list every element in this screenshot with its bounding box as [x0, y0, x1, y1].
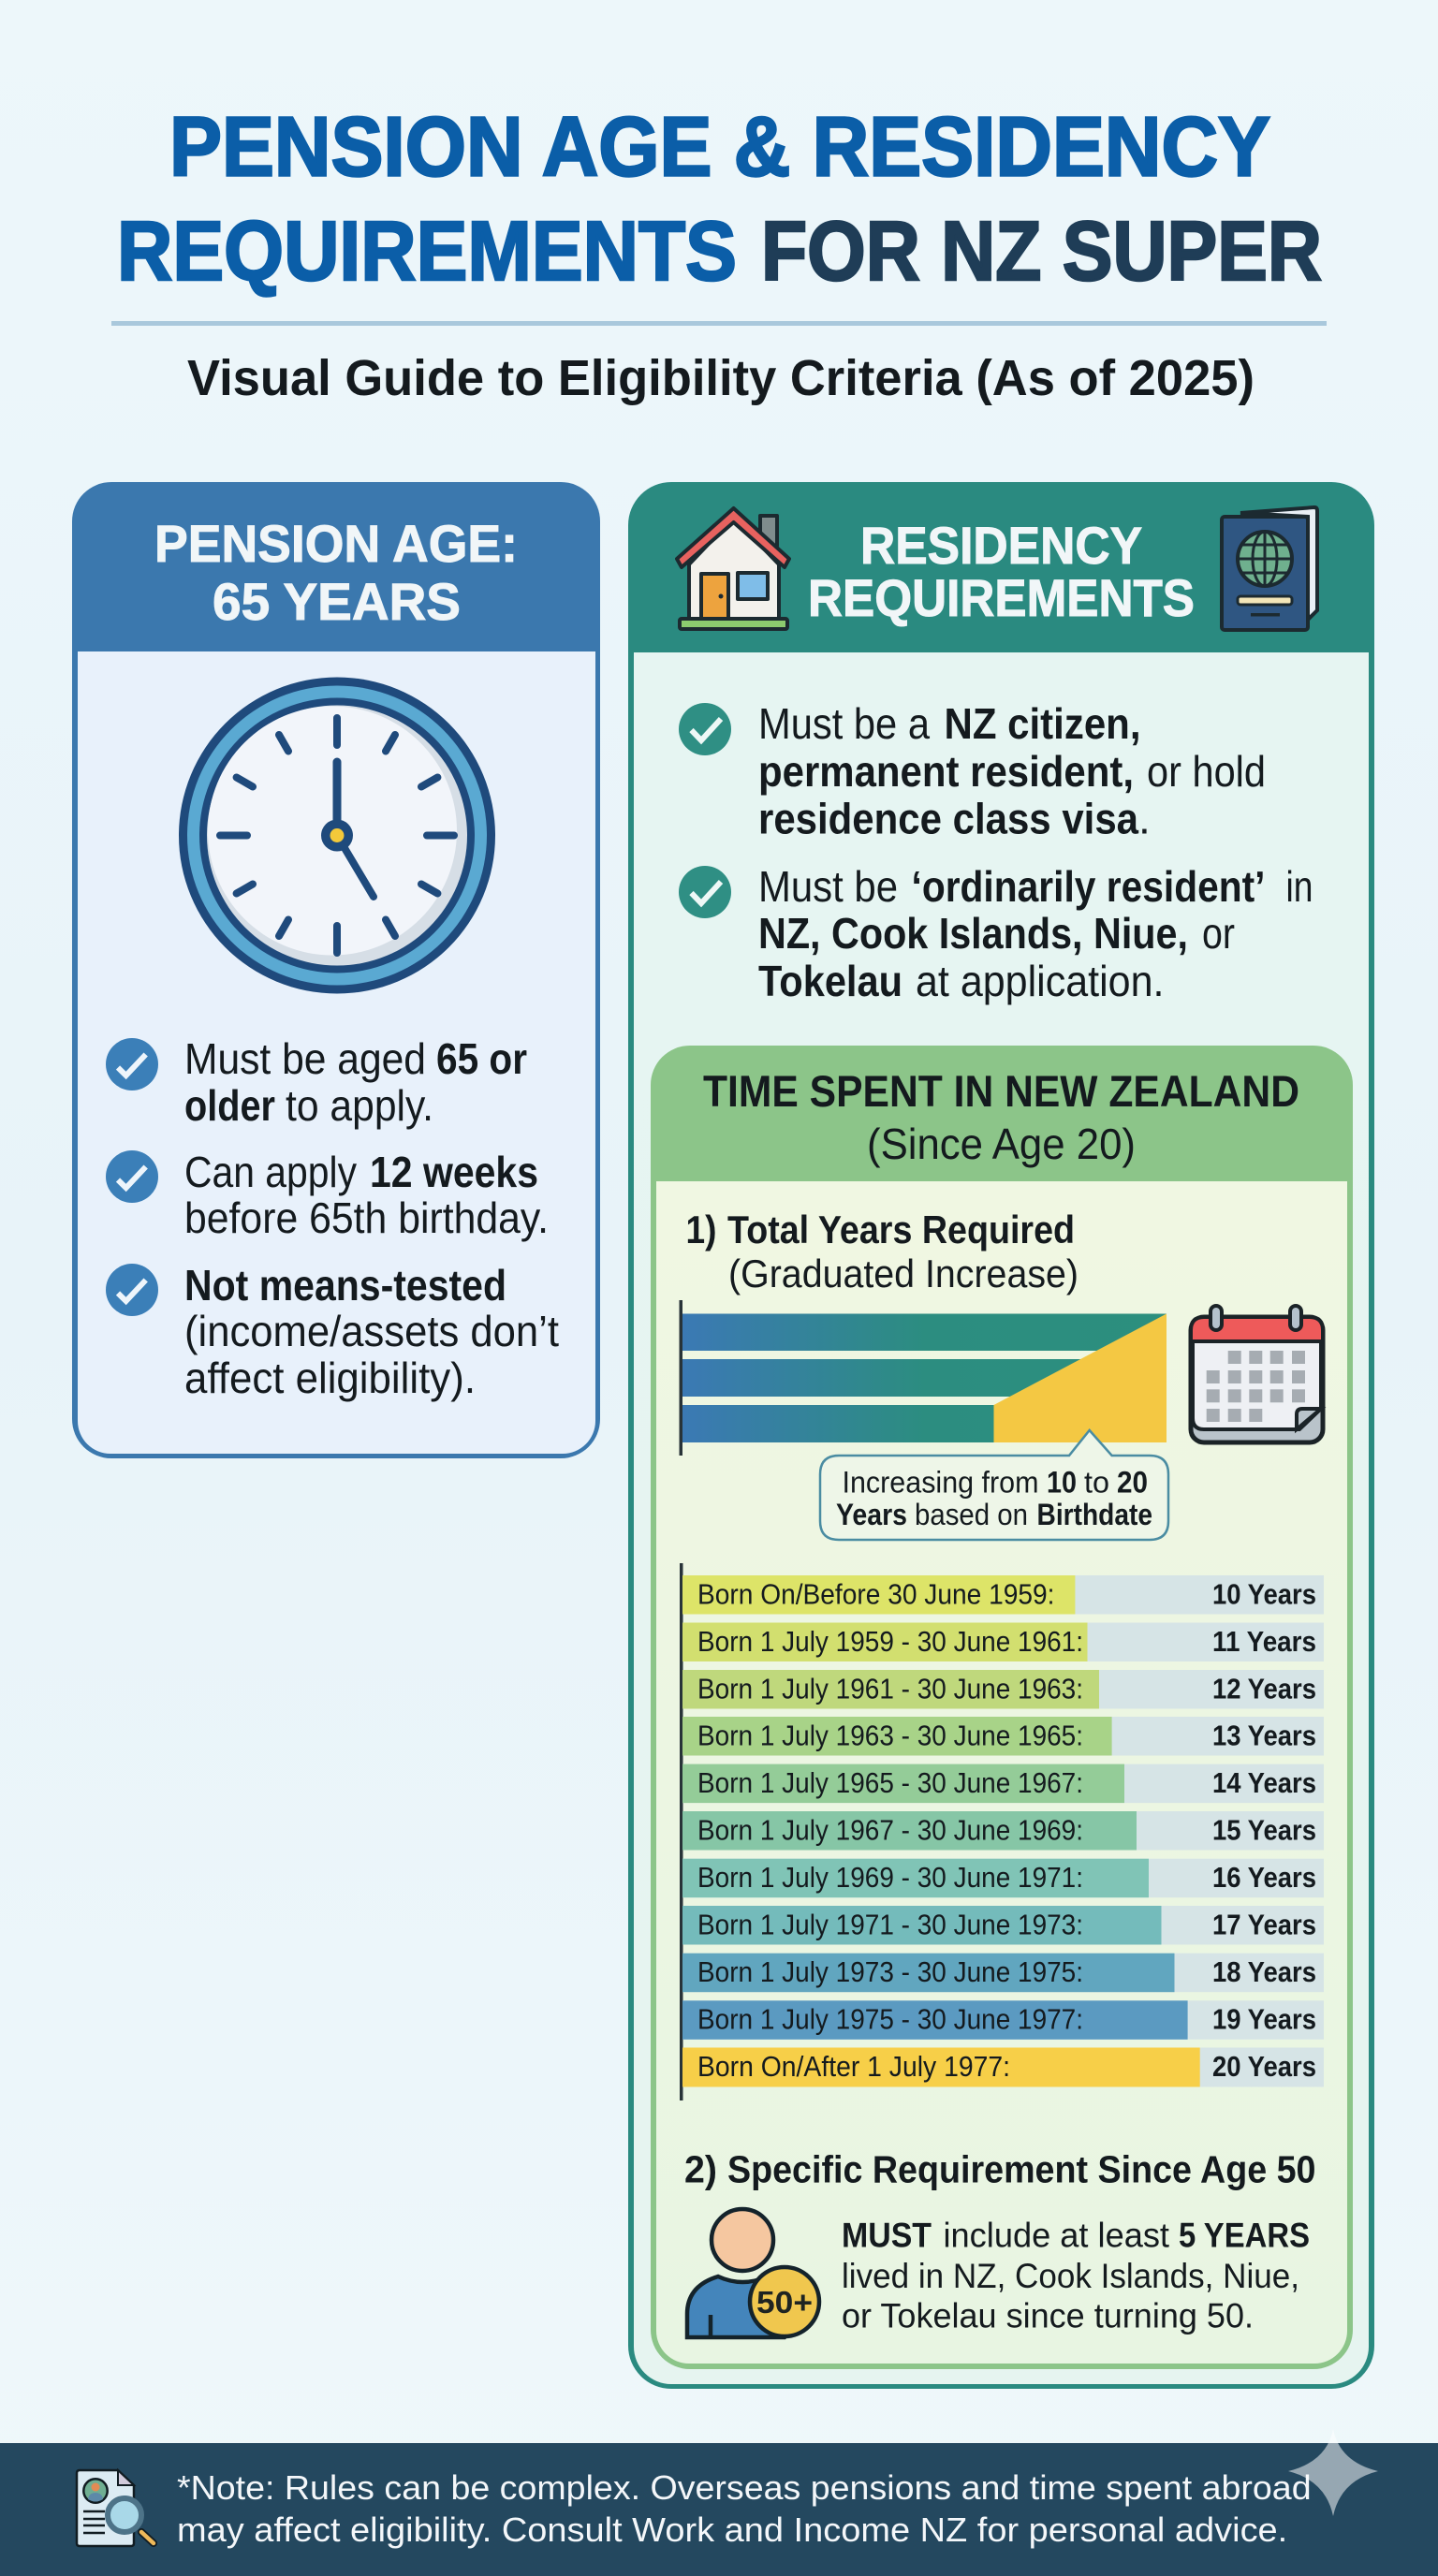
bullet: ordinarily resident: or	[1202, 909, 1235, 958]
heading: time spent: TIME SPENT IN NEW ZEALAND	[703, 1066, 1299, 1116]
row: 11 years	[682, 1623, 1324, 1661]
row: 13 years: Born 1 July 1963 - 30 June 1965:	[697, 1720, 1083, 1752]
bullet: not means-tested	[106, 1261, 559, 1402]
subheading: total years required: (Graduated Increase)	[728, 1251, 1078, 1295]
subheading: requirement since age 50: 2)	[684, 2148, 717, 2191]
bullet: ordinarily resident	[679, 862, 1313, 1005]
icon: passport	[1222, 507, 1317, 630]
text: must include 5 years: MUST	[842, 2217, 932, 2255]
row: 10 years	[682, 1575, 1324, 1614]
heading: residency: REQUIREMENTS	[808, 568, 1195, 627]
bullet: citizen: NZ citizen,	[944, 699, 1140, 748]
bullet: ordinarily resident: Tokelau	[758, 957, 902, 1005]
callout: increasing from 10 to 20: Increasing from	[843, 1466, 1039, 1500]
row: 10 years: 10 Years	[1212, 1579, 1316, 1611]
icon: person 50+: 50+	[756, 2285, 813, 2320]
heading: pension age: 65 YEARS	[213, 572, 461, 631]
bullet: not means-tested: Not means-tested	[184, 1261, 506, 1310]
row: 14 years: 14 Years	[1212, 1767, 1316, 1799]
bullet: ordinarily resident: at application.	[916, 957, 1165, 1005]
panel: residency requirements	[628, 482, 1374, 2389]
bullet: aged 65: to apply.	[286, 1081, 433, 1130]
row: 13 years: 13 Years	[1212, 1720, 1316, 1752]
row: 18 years	[682, 1954, 1324, 1992]
title: REQUIREMENTS	[117, 205, 737, 299]
subheading: requirement since age 50: Specific Requirement Since Age 50	[727, 2148, 1316, 2191]
icon: calendar	[1191, 1306, 1323, 1442]
title: FOR NZ SUPER	[761, 205, 1322, 299]
row: 16 years	[682, 1859, 1324, 1897]
callout: increasing from 10 to 20: to	[1084, 1466, 1109, 1500]
bullet: aged 65	[106, 1034, 527, 1130]
bullet: aged 65: older	[184, 1081, 275, 1130]
callout: increasing from 10 to 20	[820, 1430, 1168, 1540]
title	[117, 101, 1322, 299]
table: years required by birthdate	[680, 1563, 1324, 2100]
bullet: citizen	[679, 699, 1266, 842]
bullet: not means-tested: affect eligibility).	[184, 1354, 476, 1402]
bullet: aged 65: Must be aged	[184, 1034, 426, 1083]
heading: residency	[808, 516, 1195, 627]
bullet: citizen: .	[1138, 794, 1151, 842]
footer	[0, 2443, 1438, 2576]
title: PENSION AGE & RESIDENCY	[169, 101, 1270, 195]
row: 15 years: Born 1 July 1967 - 30 June 1969:	[697, 1814, 1083, 1846]
bullet: ordinarily resident: NZ, Cook Islands, Niue,	[758, 909, 1188, 958]
row: 12 years: 12 Years	[1212, 1674, 1316, 1705]
row: 19 years	[682, 2000, 1324, 2040]
row: 18 years: 18 Years	[1212, 1956, 1316, 1988]
row: 17 years	[682, 1906, 1324, 1945]
row: 17 years: Born 1 July 1971 - 30 June 1973:	[697, 1910, 1083, 1941]
row: 12 years: Born 1 July 1961 - 30 June 1963:	[697, 1674, 1083, 1705]
row: 20 years: 20 Years	[1212, 2051, 1316, 2083]
row: 19 years: Born 1 July 1975 - 30 June 1977:	[697, 2003, 1083, 2035]
heading: pension age: PENSION AGE:	[154, 514, 518, 573]
icon: sparkle	[1288, 2429, 1378, 2516]
text: must include 5 years: 5 YEARS	[1179, 2217, 1310, 2255]
row: 19 years: 19 Years	[1212, 2003, 1316, 2035]
subheading: total years required: Total Years Required	[727, 1208, 1075, 1251]
bullet: 12 weeks: 12 weeks	[370, 1148, 538, 1196]
bullet: ordinarily resident: in	[1286, 862, 1313, 911]
heading: time spent: (Since Age 20)	[867, 1120, 1136, 1168]
subtitle: Visual Guide to Eligibility Criteria (As of 2025)	[187, 350, 1255, 406]
bullet: ordinarily resident: Must be	[758, 862, 898, 911]
panel: time spent in New Zealand	[651, 1046, 1353, 2369]
row: 18 years: Born 1 July 1973 - 30 June 1975:	[697, 1956, 1083, 1988]
row: 17 years: 17 Years	[1212, 1910, 1316, 1941]
row: 20 years: Born On/After 1 July 1977:	[697, 2051, 1010, 2083]
icon: clock	[179, 678, 495, 994]
row: 10 years: Born On/Before 30 June 1959:	[697, 1579, 1054, 1611]
subheading: total years required	[685, 1208, 1078, 1295]
icon: person 50+	[687, 2209, 819, 2337]
row: 15 years: 15 Years	[1212, 1814, 1316, 1846]
text: must include 5 years	[842, 2217, 1310, 2335]
row: 14 years	[682, 1764, 1324, 1803]
bullet: 12 weeks	[106, 1148, 549, 1242]
bullet: citizen: or hold	[1147, 747, 1266, 796]
row: 16 years: Born 1 July 1969 - 30 June 1971:	[697, 1862, 1083, 1894]
row: 15 years	[682, 1811, 1324, 1850]
text: must include 5 years: include at least	[944, 2217, 1170, 2255]
callout: increasing from 10 to 20: based on	[915, 1498, 1028, 1531]
row: 11 years: 11 Years	[1212, 1626, 1316, 1658]
note text: *Note: Rules can be complex. Overseas pensions and time spent abroad	[177, 2469, 1312, 2507]
subheading: total years required: 1)	[685, 1208, 717, 1251]
row: 11 years: Born 1 July 1959 - 30 June 1961:	[697, 1626, 1083, 1658]
bullet: 12 weeks: before 65th birthday.	[184, 1193, 549, 1242]
icon: house	[677, 508, 789, 629]
row: 14 years: Born 1 July 1965 - 30 June 1967:	[697, 1767, 1083, 1799]
bullet: ordinarily resident: ‘ordinarily resident’	[912, 862, 1266, 911]
icon: document with magnifier	[77, 2470, 154, 2546]
heading: pension age	[154, 514, 518, 631]
bullet: citizen: permanent resident,	[758, 747, 1134, 796]
row: 13 years	[682, 1717, 1324, 1756]
callout: increasing from 10 to 20: 20	[1117, 1466, 1148, 1500]
bullet: 12 weeks: Can apply	[184, 1148, 357, 1196]
row: 16 years: 16 Years	[1212, 1862, 1316, 1894]
bullet: citizen: Must be a	[758, 699, 930, 748]
callout: increasing from 10 to 20: Years	[836, 1498, 907, 1531]
note text: may affect eligibility. Consult Work and Income NZ for personal advice.	[177, 2511, 1287, 2549]
bullet: citizen: residence class visa	[758, 794, 1138, 842]
heading: time spent	[703, 1066, 1299, 1168]
panel: pension age	[72, 482, 600, 1458]
row: 20 years	[682, 2048, 1324, 2087]
callout: increasing from 10 to 20: 10	[1047, 1466, 1077, 1500]
heading: residency: RESIDENCY	[860, 516, 1142, 575]
bullet: aged 65: 65 or	[436, 1034, 527, 1083]
callout: increasing from 10 to 20: Birthdate	[1037, 1498, 1152, 1531]
bullet: not means-tested: (income/assets don’t	[184, 1307, 559, 1355]
chart: graduated increase	[680, 1300, 1167, 1456]
row: 12 years	[682, 1670, 1324, 1709]
text: must include 5 years: lived in NZ, Cook Islands, Niue,	[842, 2257, 1299, 2295]
note text	[177, 2469, 1312, 2549]
text: must include 5 years: or Tokelau since turning 50.	[842, 2297, 1254, 2335]
